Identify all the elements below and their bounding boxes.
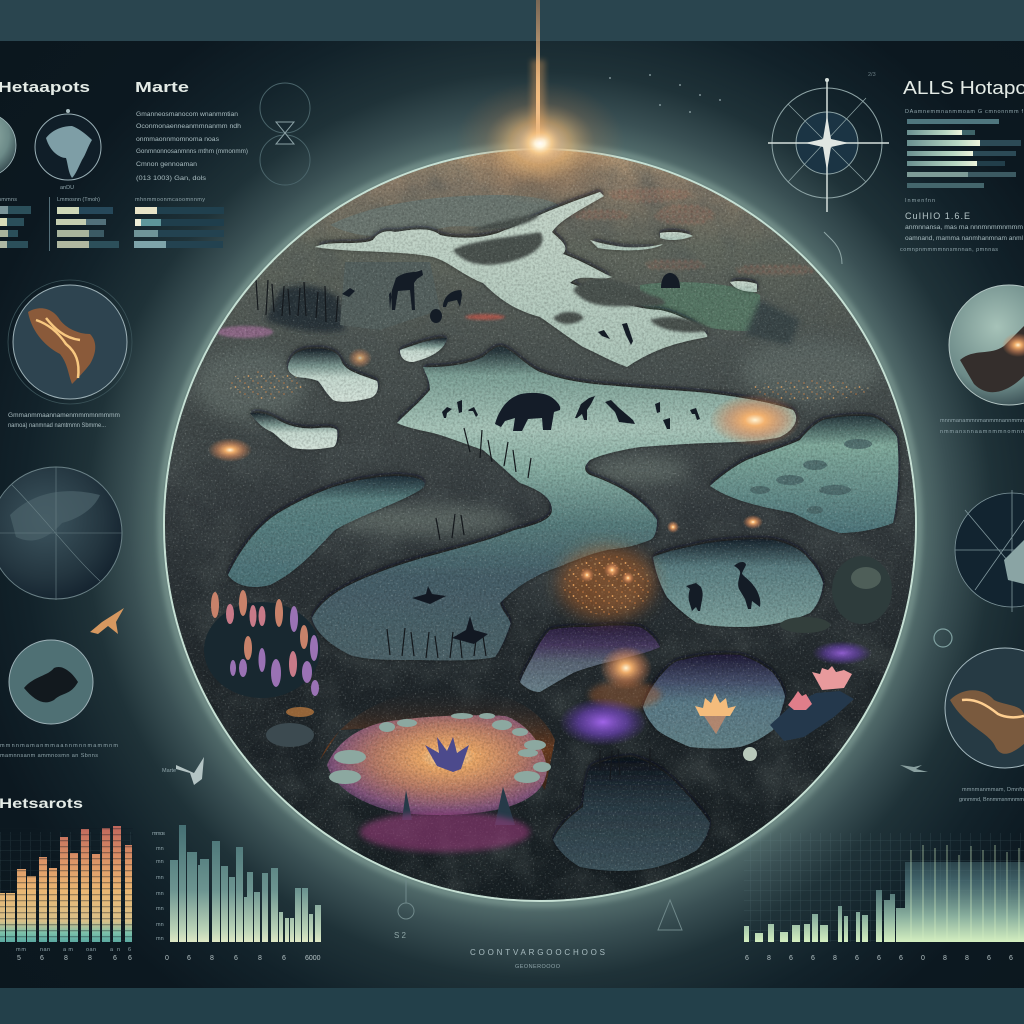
axis labels teal: 6 [234,955,238,962]
text block: marts: (013 1003) Gan, dols [136,175,207,182]
axis labels teal: 8 [210,955,214,962]
distant birds: 2/3 [868,72,876,78]
axis labels warm: 6 [40,955,44,962]
axis labels right: 6 [899,955,903,962]
axis labels teal: mn [156,846,164,852]
right bars block: DAamnemmnanmmoam G cmnonnmm f [905,109,1023,115]
bar chart right grid [744,833,1024,942]
glowing fires [208,348,870,709]
axis labels teal: mn [156,922,164,928]
bottom caption: GEONEROOOO [515,964,561,970]
text block: marts: Gmanneosmanocom wnanmmtian [136,111,238,118]
axis labels warm: 6 [128,947,131,953]
right text block [900,198,1024,253]
axis labels teal: 6 [187,955,191,962]
bottom caption [470,948,605,970]
bottom band [0,988,1024,1024]
globe left orange map [8,280,132,404]
mid left lake [228,476,425,587]
small bars left [0,197,31,248]
land mottling [160,148,920,904]
globe right bottom [945,648,1024,768]
globe africa [35,109,101,191]
axis labels warm [16,947,132,962]
axis labels right: 8 [767,955,771,962]
axis labels right: 8 [833,955,837,962]
text block: marts: onmmaonnmomnoma noas [136,136,220,143]
small caption marts: Marte [162,768,176,774]
right lake [710,416,898,533]
right text block: comnpnmmmmnnsmnnan, pmnnas [900,247,998,253]
axis labels teal: mn [156,875,164,881]
pink ground flowers [360,812,530,852]
globe right top [949,285,1024,405]
axis labels teal: 8 [258,955,262,962]
small marker bottom [394,880,682,940]
axis labels teal: mn [156,891,164,897]
small ring [934,629,952,647]
right text block: Inmenfnn [905,198,935,204]
orange glowing pond [327,715,547,815]
caption right 1 [940,418,1024,435]
caption right 2 [959,787,1024,803]
right text block: anmnnansa, mas ma nnnmnmmnmmm [905,224,1023,231]
top band [0,0,1024,41]
divider line [49,197,50,251]
axis labels right: 6 [811,955,815,962]
white flower [743,747,757,761]
caption left 2: mamnnsanm ammnosmn an Sbnns [0,753,98,759]
small bars middle: Lmmosnn (Tmoh) [57,197,100,203]
bar chart warm [0,826,133,942]
text block: marts [136,111,248,182]
axis labels right: 6 [789,955,793,962]
warm red flower fields [217,188,815,338]
globe right wire [955,490,1024,612]
right text block: CuIHIO 1.6.E [905,211,970,221]
axis labels warm: 6 [128,955,132,962]
small outline globes top [260,83,310,185]
axis labels right: 6 [877,955,881,962]
lighter speckled land areas [195,340,880,536]
silhouette: dog [389,270,423,310]
pink lily flowers [770,666,854,741]
caption right 1: nmmansnnaamnmmnomnn [940,429,1024,435]
caption right 1: mnnmanammnmanmmnannmmn [940,418,1024,424]
caption left 2 [0,743,118,759]
axis labels warm: 5 [17,955,21,962]
axis labels warm: 8 [88,955,92,962]
dark islands in upper water [453,215,713,332]
caption left 1: Gmmanmmaannamenmmmmnmmmm [8,412,120,419]
caption right 2: gnnmmd, Bnnmmsnmnmm [959,797,1024,803]
heron pond [653,539,823,627]
water plant orange pond [329,713,551,825]
axis labels teal: mn [156,859,164,865]
text block: marts: Gonmnonnosanmnns mthm (mmonmm) [136,148,248,155]
silhouette: herons [686,562,760,611]
axis labels warm: 6 [113,955,117,962]
caption left 1: namoa) nanmnad namtmmn Sbmme... [8,422,106,429]
lily pads right lake [750,439,872,514]
silhouette: grazing animals [342,273,680,323]
axis labels warm: mm [16,947,26,953]
right text block: oamnand, mamma nanmhanmnam anml [905,235,1024,242]
globe top left partial [0,113,16,177]
purple patch right [812,641,872,665]
bottom dark pond [553,757,710,871]
axis labels warm: nan [40,947,50,953]
globe left asia [9,640,93,724]
dark foliage clumps [780,556,892,633]
text block: marts: Oconmonaenneanmmnanmm ndh [136,123,241,130]
axis labels warm: oan [86,947,96,953]
heading: hotspots top left: Hetaapots [0,79,90,96]
sun glow [455,60,625,205]
left ponds [250,338,447,449]
axis labels right: 8 [943,955,947,962]
heading: hotspots lower: Hetsarots [0,795,83,811]
lotus flower [695,693,736,734]
axis labels warm: am [63,947,73,953]
axis labels right: 6 [987,955,991,962]
axis labels teal [152,831,321,962]
heading: alls hotspots: ALLS Hotapo [903,78,1024,98]
globe africa: anDU [60,185,74,191]
compass [768,78,889,212]
purple sparkle patch [559,698,647,746]
axis labels teal: 0 [165,955,169,962]
lotus pond [643,655,785,748]
dark water lilies [412,586,488,644]
purple pond [520,626,660,692]
heading: marts: Marte [135,79,189,96]
pin marker [824,232,842,264]
silhouette: wading birds [442,323,700,429]
upper meadow [265,195,800,345]
reed strip [320,706,555,790]
marsh grass [256,280,650,780]
axis labels teal: mn [156,906,164,912]
axis labels right: 8 [965,955,969,962]
small bars right [134,197,224,248]
bottom caption: COONTVARGOOCHOOS [470,948,605,957]
caption left 2: mmnnmamanmmaannmnnmammnm [0,743,118,749]
wetland globe [160,148,920,904]
small bars middle [56,197,119,248]
axis labels teal: 6000 [305,955,321,962]
right bars block [905,109,1023,188]
flower spikes cluster [204,590,320,747]
axis labels warm: 8 [64,955,68,962]
axis labels warm: an [110,947,120,953]
axis labels right [745,955,1013,962]
upper streams [315,192,757,367]
axis labels teal: mn [156,936,164,942]
caption left 1 [8,412,120,429]
central and big lake [312,347,796,660]
caption right 2: mmnmanmmam, Dmnfn [962,787,1024,793]
axis labels right: 6 [1009,955,1013,962]
axis labels right: 0 [921,955,925,962]
bar chart teal [170,825,321,942]
axis labels teal: 6 [282,955,286,962]
grain texture [160,148,920,904]
axis labels teal: mmos [152,831,165,837]
text block: marts: Cmnon gennoaman [136,161,197,168]
creature right [900,765,928,772]
fish orange [90,608,124,634]
small marker bottom: S 2 [394,931,407,940]
silhouette: bear [495,393,560,431]
land base [160,148,920,904]
land speckles [160,148,920,904]
globe glow ring [161,146,919,904]
fish white [176,757,204,785]
sun beam [536,0,540,140]
axis labels right: 6 [745,955,749,962]
axis labels right: 6 [855,955,859,962]
small bars right: mhnmmoonmcaoomnnmy [135,197,205,203]
globe left dark wire [0,467,122,600]
